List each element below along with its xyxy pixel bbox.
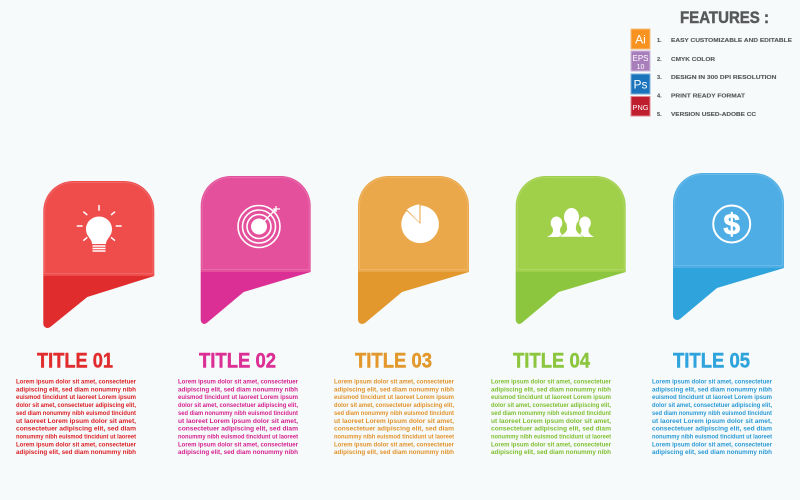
body text 2: consectetuer adipiscing elit, sed diam	[178, 426, 298, 433]
body text 1: adipiscing elit, sed diam nonummy nibh	[16, 449, 136, 456]
body text 5: Lorem ipsum dolor sit amet, consectetuer	[652, 441, 772, 448]
heading: title 03: TITLE 03	[355, 350, 432, 372]
feature list: 5.	[657, 112, 662, 118]
body text 2: sed diam nonummy nibh euismod tincidunt	[178, 410, 299, 417]
body text 1	[16, 378, 137, 456]
body text 1: dolor sit amet, consectetuer adipiscing elit,	[16, 402, 136, 409]
body text 4: consectetuer adipiscing elit, sed diam	[491, 426, 611, 433]
body text 1: Lorem ipsum dolor sit amet, consectetuer	[16, 378, 136, 386]
body text 2: Lorem ipsum dolor sit amet, consectetuer	[178, 378, 298, 386]
body text 4: adipiscing elit, sed diam nonummy nibh	[491, 449, 611, 456]
icon: Ps badge	[631, 74, 650, 94]
heading: title 05: TITLE 05	[673, 350, 750, 372]
heading: title 02: TITLE 02	[199, 350, 276, 372]
body text 2: dolor sit amet, consectetuer adipiscing elit,	[178, 402, 298, 409]
body text 1: Lorem ipsum dolor sit amet, consectetuer	[16, 441, 136, 448]
column 1	[16, 350, 137, 456]
body text 5: Lorem ipsum dolor sit amet, consectetuer	[652, 378, 772, 386]
body text 2: adipiscing elit, sed diam nonummy nibh	[178, 386, 298, 393]
feature list: VERSION USED-ADOBE CC	[671, 112, 756, 118]
body text 4: Lorem ipsum dolor sit amet, consectetuer	[491, 378, 611, 386]
body text 1: nonummy nibh euismod tincidunt ut laoreet	[16, 434, 137, 440]
icon: pie chart	[401, 204, 439, 243]
icon: PNG badge: PNG	[632, 103, 649, 112]
icon: Ai badge: Ai	[635, 32, 646, 46]
body text 3: Lorem ipsum dolor sit amet, consectetuer	[334, 441, 454, 448]
body text 4: dolor sit amet, consectetuer adipiscing elit,	[491, 402, 611, 409]
features heading: FEATURES :	[680, 8, 769, 27]
icon: EPS badge: 10	[637, 64, 644, 71]
column 4	[491, 350, 612, 456]
column 3	[334, 350, 455, 456]
column 2	[178, 350, 299, 456]
body text 5: adipiscing elit, sed diam nonummy nibh	[652, 449, 772, 456]
body text 4: nonummy nibh euismod tincidunt ut laoreet	[491, 434, 612, 440]
icon: PNG badge	[631, 96, 650, 116]
body text 2: ut laoreet Lorem ipsum dolor sit amet,	[178, 418, 298, 425]
card 3: orange tag with pie chart	[358, 176, 469, 324]
body text 3: ut laoreet Lorem ipsum dolor sit amet,	[334, 418, 454, 425]
body text 2: nonummy nibh euismod tincidunt ut laoreet	[178, 434, 299, 440]
heading: title 04: TITLE 04	[513, 350, 590, 372]
feature list: 4.	[657, 94, 662, 100]
icon: dollar coin	[713, 206, 750, 242]
icon: Ps badge: Ps	[633, 78, 648, 92]
body text 5: sed diam nonummy nibh euismod tincidunt	[652, 410, 773, 417]
body text 3: Lorem ipsum dolor sit amet, consectetuer	[334, 378, 454, 386]
icon: dollar coin: $	[723, 208, 740, 242]
body text 1: ut laoreet Lorem ipsum dolor sit amet,	[16, 418, 136, 425]
body text 4: adipiscing elit, sed diam nonummy nibh	[491, 386, 611, 393]
body text 3: consectetuer adipiscing elit, sed diam	[334, 426, 454, 433]
body text 1: adipiscing elit, sed diam nonummy nibh	[16, 386, 136, 393]
icon: EPS badge: EPS	[632, 54, 649, 63]
body text 4: sed diam nonummy nibh euismod tincidunt	[491, 410, 612, 417]
feature list: 1.	[657, 38, 662, 44]
icon: lightbulb	[77, 205, 122, 251]
body text 1: consectetuer adipiscing elit, sed diam	[16, 426, 136, 433]
body text 2: adipiscing elit, sed diam nonummy nibh	[178, 449, 298, 456]
body text 4: euismod tincidunt ut laoreet Lorem ipsum	[491, 394, 611, 401]
body text 2: Lorem ipsum dolor sit amet, consectetuer	[178, 441, 298, 448]
column 5	[652, 350, 773, 456]
body text 5	[652, 378, 773, 456]
body text 1: sed diam nonummy nibh euismod tincidunt	[16, 410, 137, 417]
heading: title 01: TITLE 01	[37, 350, 113, 372]
body text 3: sed diam nonummy nibh euismod tincidunt	[334, 410, 455, 417]
feature list: DESIGN IN 300 DPI RESOLUTION	[671, 75, 776, 81]
icon: target	[238, 206, 280, 248]
body text 2	[178, 378, 299, 456]
feature list: 3.	[657, 75, 662, 81]
body text 5: adipiscing elit, sed diam nonummy nibh	[652, 386, 772, 393]
body text 3: nonummy nibh euismod tincidunt ut laoreet	[334, 434, 455, 440]
body text 5: ut laoreet Lorem ipsum dolor sit amet,	[652, 418, 772, 425]
card 1: red tag with lightbulb	[43, 181, 154, 328]
body text 5: consectetuer adipiscing elit, sed diam	[652, 426, 772, 433]
body text 4: Lorem ipsum dolor sit amet, consectetuer	[491, 441, 611, 448]
body text 3	[334, 378, 455, 456]
body text 4: ut laoreet Lorem ipsum dolor sit amet,	[491, 418, 611, 425]
body text 4	[491, 378, 612, 456]
body text 1: euismod tincidunt ut laoreet Lorem ipsum	[16, 394, 136, 401]
card 4: green tag with people	[516, 176, 626, 324]
body text 5: euismod tincidunt ut laoreet Lorem ipsum	[652, 394, 772, 401]
feature list: CMYK COLOR	[671, 57, 715, 63]
body text 3: adipiscing elit, sed diam nonummy nibh	[334, 449, 454, 456]
feature list: EASY CUSTOMIZABLE AND EDITABLE	[671, 38, 792, 44]
feature list: PRINT READY FORMAT	[671, 94, 746, 100]
body text 3: euismod tincidunt ut laoreet Lorem ipsum	[334, 394, 454, 401]
features panel	[631, 8, 792, 118]
body text 2: euismod tincidunt ut laoreet Lorem ipsum	[178, 394, 298, 401]
feature list	[657, 38, 792, 118]
body text 3: adipiscing elit, sed diam nonummy nibh	[334, 386, 454, 393]
icon: Ai badge	[631, 29, 650, 49]
body text 5: nonummy nibh euismod tincidunt ut laoreet	[652, 434, 773, 440]
icon: people	[547, 208, 594, 237]
body text 3: dolor sit amet, consectetuer adipiscing elit,	[334, 402, 454, 409]
feature list: 2.	[657, 57, 662, 63]
icon: EPS badge	[631, 51, 650, 71]
card 5: blue tag with dollar coin	[673, 173, 784, 320]
card 2: pink tag with target	[201, 176, 311, 324]
body text 5: dolor sit amet, consectetuer adipiscing elit,	[652, 402, 772, 409]
